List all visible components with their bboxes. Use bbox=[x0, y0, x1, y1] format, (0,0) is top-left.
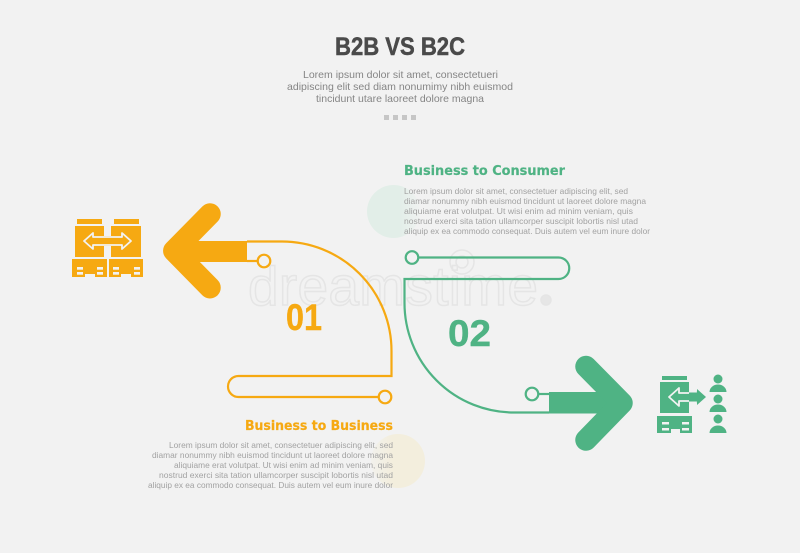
subtitle text: adipiscing elit sed diam nonumimy nibh euismod bbox=[287, 81, 513, 93]
body text: business to consumer: aliquip ex ea commodo consequat. Duis autem vel eum inure dolor bbox=[404, 226, 650, 236]
body text: business to business: nostrud exerci sita tation ullamcorper suscipit lobortis nisl utad bbox=[159, 470, 393, 480]
icon: box to customers bbox=[657, 374, 726, 433]
pagination dots bbox=[384, 115, 416, 120]
number 01: 01 bbox=[286, 297, 322, 338]
yellow node bottom bbox=[379, 391, 391, 403]
body text: business to consumer: aliquiame erat volutpat. Ut wisi enim ad minim veniam, quis bbox=[404, 206, 633, 216]
yellow node top bbox=[247, 255, 270, 267]
arrow: yellow pointing left with connector bbox=[174, 214, 392, 403]
body text: business to business: aliquip ex ea commodo consequat. Duis autem vel eum inure dolor bbox=[148, 480, 393, 490]
title: B2B VS B2C bbox=[335, 33, 465, 61]
number 02: 02 bbox=[448, 313, 491, 354]
body text: business to business: diamar nonummy nibh euismod tincidunt ut laoreet dolore magna bbox=[152, 450, 393, 460]
decorative circle: green bbox=[367, 185, 420, 238]
heading: business to consumer: Business to Consumer bbox=[404, 163, 565, 179]
subtitle text bbox=[287, 69, 513, 105]
body text: business to business: aliquiame erat volutpat. Ut wisi enim ad minim veniam, quis bbox=[174, 460, 393, 470]
green arrow head and shaft bbox=[549, 366, 622, 440]
decorative circle: yellow bbox=[371, 434, 425, 488]
body text: business to consumer: Lorem ipsum dolor sit amet, consectetuer adipiscing elit, sed bbox=[404, 186, 628, 196]
panel: business to business text bbox=[148, 418, 425, 490]
body text: business to business: Lorem ipsum dolor sit amet, consectetuer adipiscing elit, sed bbox=[169, 440, 393, 450]
subtitle text: Lorem ipsum dolor sit amet, consectetueri bbox=[303, 69, 498, 81]
body text: business to consumer bbox=[404, 186, 650, 236]
green node top bbox=[406, 251, 418, 264]
subtitle text: tincidunt utare laoreet dolore magna bbox=[316, 93, 484, 105]
body text: business to consumer: nostrud exerci sita tation ullamcorper suscipit lobortis nisl utad bbox=[404, 216, 638, 226]
green connector line bbox=[404, 258, 569, 412]
watermark: dreamstime bbox=[248, 255, 538, 317]
green node bottom bbox=[526, 388, 549, 400]
icon: boxes on pallets with double arrow bbox=[72, 219, 143, 277]
body text: business to business bbox=[148, 440, 393, 490]
customers bbox=[710, 374, 726, 433]
heading: business to business: Business to Business bbox=[245, 418, 393, 434]
yellow connector line bbox=[228, 242, 392, 397]
yellow arrow head and shaft bbox=[174, 214, 247, 288]
arrow: green pointing right with connector bbox=[404, 251, 622, 440]
body text: business to consumer: diamar nonummy nibh euismod tincidunt ut laoreet dolore magna bbox=[404, 196, 646, 206]
panel: business to consumer text bbox=[367, 163, 650, 238]
